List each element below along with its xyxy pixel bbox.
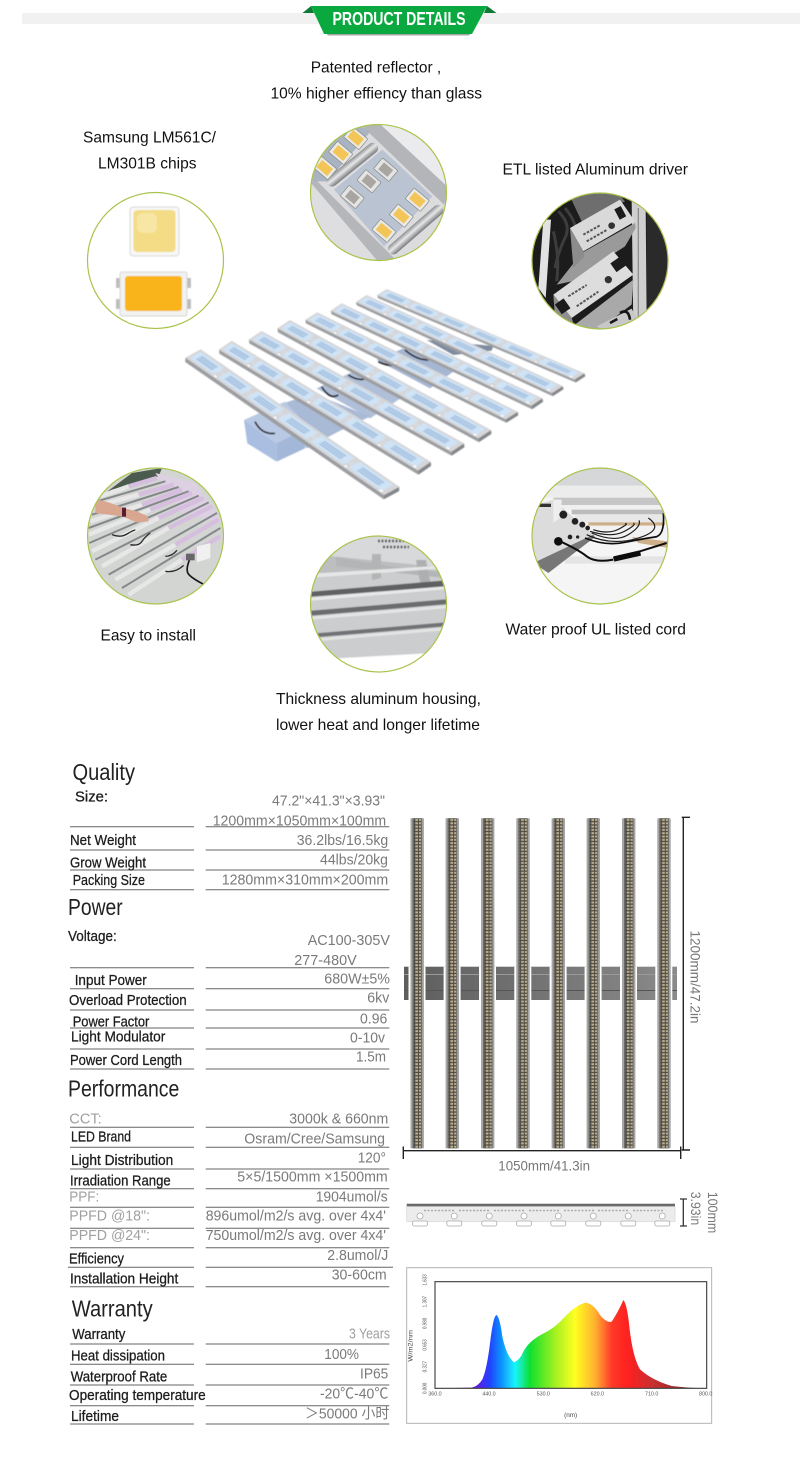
panel: warranty specs: [69, 1296, 390, 1425]
side profile: [407, 1204, 675, 1226]
photo circle: aluminum housing: [308, 534, 450, 676]
row: irradiation range: Irradiation Range: [70, 1173, 171, 1190]
row: cct: CCT:: [69, 1111, 102, 1127]
main product: tilted light bars: [182, 289, 588, 499]
caption: reflector: [270, 60, 482, 102]
row: installation height: Installation Height: [70, 1270, 179, 1287]
caption: driver: ETL listed Aluminum driver: [502, 162, 688, 178]
caption: chips: [83, 130, 217, 172]
row: ppfd 18: [69, 1209, 386, 1225]
bar 3: [246, 331, 468, 456]
thickness dimension: 3.93in: [688, 1192, 704, 1225]
row: ppfd 18: PPFD @18":: [69, 1209, 150, 1225]
banner heading: [22, 6, 800, 36]
row: power factor: 0.96: [360, 1011, 387, 1027]
row: light distribution: Light Distribution: [71, 1152, 173, 1169]
driver boxes and cables: [244, 340, 493, 462]
row: voltage: [68, 928, 390, 969]
row: voltage: 277-480V: [294, 953, 357, 969]
row: efficiency: [69, 1248, 388, 1267]
row: ppfd 24: 750umol/m2/s avg. over 4x4': [206, 1228, 386, 1244]
row: waterproof rate: Waterproof Rate: [71, 1369, 167, 1386]
photo circle: waterproof cord: [531, 467, 669, 605]
row: voltage: Voltage:: [68, 928, 117, 945]
row: efficiency: Efficiency: [69, 1250, 124, 1267]
caption: housing: lower heat and longer lifetime: [276, 717, 480, 734]
photo circle: LED chips: [88, 192, 224, 328]
row: efficiency: 2.8umol/J: [327, 1248, 388, 1264]
row: grow weight: Grow Weight: [70, 854, 147, 871]
spectrum curve: [435, 1300, 707, 1388]
row: lifetime: ＞50000 小时: [305, 1405, 389, 1422]
y axis title: W/m2/nm: [409, 1330, 415, 1362]
thickness dimension: 100mm: [705, 1192, 721, 1233]
y axis ticks: 0.000: [423, 1383, 429, 1394]
row: cct: 3000k & 660nm: [289, 1111, 388, 1127]
caption: chips: Samsung LM561C/: [83, 130, 217, 146]
heading: quality: Quality: [72, 759, 135, 785]
row: installation height: [70, 1267, 387, 1287]
caption: reflector: Patented reflector ,: [311, 60, 441, 76]
cross rail: [404, 967, 677, 1000]
row: packing size: 1280mm×310mm×200mm: [222, 872, 388, 888]
heading: warranty: Warranty: [72, 1296, 153, 1322]
chart: side-view dimension drawing: [407, 1192, 721, 1233]
row: power cord length: Power Cord Length: [70, 1052, 182, 1069]
row: ppfd 24: [69, 1228, 386, 1244]
width dimension: 1050mm/41.3in: [498, 1158, 590, 1174]
bar 6: [328, 303, 546, 409]
row: size: 47.2"×41.3"×3.93": [272, 794, 385, 810]
row: power factor: [73, 1011, 387, 1031]
x axis ticks: 440.0: [482, 1392, 496, 1398]
panel: power specs: [68, 894, 390, 1069]
bar 7: [353, 295, 566, 396]
row: led brand: [71, 1129, 385, 1147]
row: net weight: Net Weight: [70, 832, 137, 849]
row: warranty: Warranty: [72, 1326, 126, 1343]
row: size: Size:: [75, 789, 108, 806]
chart: top-view dimension drawing: [403, 817, 704, 1174]
row: input power: 680W±5%: [324, 971, 390, 987]
width dimension: [403, 1146, 681, 1174]
row: power cord length: 1.5m: [356, 1050, 386, 1066]
row: packing size: Packing Size: [73, 872, 145, 889]
caption: chips: LM301B chips: [98, 155, 197, 172]
bar 2: [216, 341, 434, 475]
caption: housing: Thickness aluminum housing,: [276, 691, 481, 708]
bar 1: [182, 349, 403, 499]
row: power cord length: [70, 1050, 386, 1069]
x axis ticks: 800.0: [699, 1392, 712, 1398]
row: installation height: 30-60cm: [332, 1267, 387, 1283]
row: waterproof rate: [71, 1366, 388, 1386]
y axis ticks: 0.327: [423, 1361, 429, 1372]
chart: light spectrum: [407, 1268, 712, 1423]
row: warranty: 3 Years: [349, 1326, 390, 1342]
photo circle: reflector: [310, 124, 448, 262]
caption: housing: [276, 691, 481, 734]
y axis ticks: 1.307: [423, 1296, 429, 1307]
row: net weight: [70, 832, 388, 849]
x axis ticks: 360.0: [428, 1392, 442, 1398]
row: waterproof rate: IP65: [360, 1366, 388, 1382]
row: ppf: [69, 1190, 388, 1206]
row: packing size: [73, 872, 388, 889]
height dimension: 1200mm/47.2in: [688, 930, 704, 1024]
row: voltage: AC100-305V: [308, 933, 390, 949]
x axis ticks: 620.0: [591, 1392, 604, 1398]
caption: reflector: 10% higher effiency than glass: [270, 85, 482, 102]
bar 8: [375, 289, 588, 382]
thickness dimension: [680, 1192, 721, 1233]
row: overload protection: 6kv: [367, 990, 390, 1006]
row: ppfd 24: PPFD @24":: [69, 1228, 150, 1244]
row: ppf: 1904umol/s: [316, 1190, 388, 1206]
row: light distribution: [71, 1150, 386, 1169]
row: ppfd 18: 896umol/m2/s avg. over 4x4': [206, 1209, 386, 1225]
row: operating temperature: [69, 1386, 388, 1404]
y axis ticks: [423, 1274, 429, 1394]
y axis ticks: 1.633: [423, 1274, 429, 1286]
row: input power: Input Power: [75, 972, 147, 989]
row: grow weight: 44lbs/20kg: [320, 852, 388, 868]
row: size: [75, 789, 386, 830]
y axis ticks: 0.653: [423, 1339, 429, 1351]
row: lifetime: Lifetime: [71, 1408, 119, 1425]
eight light bars: [408, 818, 672, 1148]
photo circle: easy install: [86, 467, 224, 605]
row: size: 1200mm×1050mm×100mm: [213, 814, 386, 830]
bar 4: [274, 320, 495, 442]
row: operating temperature: Operating temperature: [69, 1387, 206, 1404]
row: led brand: LED Brand: [71, 1129, 131, 1146]
row: light modulator: 0-10v: [350, 1030, 386, 1046]
heading: performance: Performance: [68, 1076, 179, 1102]
caption: cord: Water proof UL listed cord: [506, 621, 686, 638]
x axis ticks: 530.0: [537, 1392, 550, 1398]
row: heat dissipation: [71, 1347, 359, 1365]
x axis title: (nm): [564, 1412, 577, 1419]
row: irradiation range: 5×5/1500mm ×1500mm: [237, 1170, 388, 1186]
caption: install: Easy to install: [100, 628, 196, 645]
row: net weight: 36.2lbs/16.5kg: [297, 833, 388, 849]
row: input power: [75, 971, 390, 989]
x axis ticks: 710.0: [645, 1392, 658, 1398]
row: light distribution: 120°: [358, 1150, 386, 1166]
banner title: PRODUCT DETAILS: [332, 8, 466, 29]
row: heat dissipation: Heat dissipation: [71, 1348, 165, 1365]
row: cct: [69, 1111, 388, 1127]
row: overload protection: [69, 990, 390, 1009]
row: warranty: [72, 1326, 390, 1343]
y axis ticks: 0.980: [423, 1318, 429, 1329]
row: operating temperature: -20℃-40℃: [320, 1386, 388, 1402]
heading: power: Power: [68, 894, 123, 920]
row: power factor: Power Factor: [73, 1014, 149, 1031]
row: light modulator: Light Modulator: [71, 1029, 165, 1046]
photo circle: driver: [531, 192, 669, 330]
row: irradiation range: [70, 1170, 388, 1190]
height dimension: [682, 817, 704, 1150]
bar 5: [302, 312, 521, 423]
row: heat dissipation: 100%: [324, 1347, 359, 1363]
row: ppf: PPF:: [69, 1190, 99, 1206]
row: led brand: Osram/Cree/Samsung: [244, 1131, 385, 1147]
row: overload protection: Overload Protection: [69, 992, 187, 1009]
row: light modulator: [71, 1029, 386, 1046]
row: lifetime: [71, 1405, 389, 1425]
x axis ticks: [428, 1392, 712, 1398]
panel: performance specs: [68, 1076, 393, 1287]
row: grow weight: [70, 852, 388, 871]
panel: quality specs: [70, 759, 389, 890]
